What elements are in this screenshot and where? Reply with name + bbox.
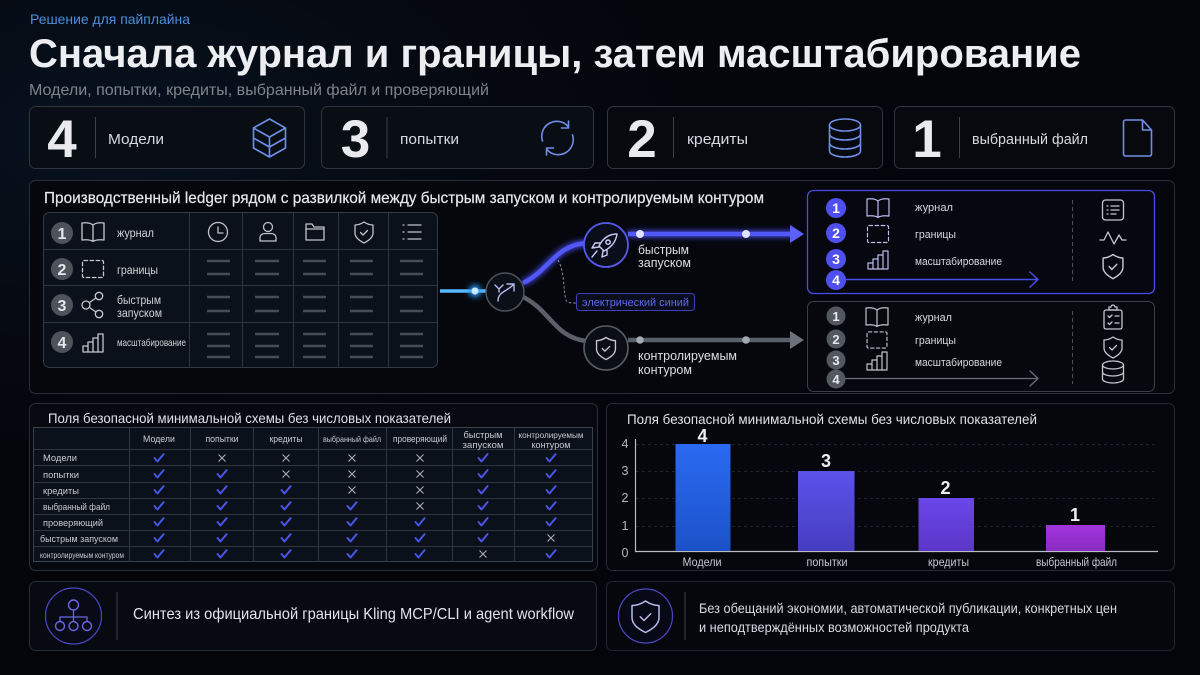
- bar: выбранный файл 1: [1036, 505, 1117, 569]
- y axis labels: 1: [622, 519, 629, 533]
- KPI label выбранный файл: выбранный файл: [972, 132, 1088, 148]
- placeholder cell lines: [207, 261, 423, 357]
- step badges: 4: [832, 272, 840, 288]
- column headers: быстрым: [464, 430, 502, 440]
- panel: bar chart: [606, 404, 1174, 570]
- disclaimer text: Без обещаний экономии, автоматической публикации, конкретных цен: [699, 601, 1117, 616]
- bar: кредиты 2: [918, 478, 974, 569]
- icon: shield node: [584, 326, 628, 370]
- KPI number 4: 4: [47, 110, 77, 169]
- icon: rocket node: [584, 223, 628, 267]
- row 4: масштабирование: масштабирование: [117, 337, 186, 349]
- bar chart: [622, 426, 1158, 569]
- row 3: быстрым запуском: [51, 292, 162, 320]
- row headers: проверяющий: [43, 518, 103, 529]
- KPI number 3: 3: [341, 110, 370, 169]
- matrix heading: Поля безопасной минимальной схемы без числовых показателей: [48, 410, 451, 426]
- column headers: [143, 430, 584, 450]
- step labels: масштабирование: [915, 357, 1002, 369]
- row 2: границы: границы: [117, 265, 158, 277]
- row 1: журнал: журнал: [117, 228, 154, 240]
- y axis labels: 4: [622, 437, 629, 451]
- check and cross marks: [154, 454, 556, 558]
- callout: электрический синий: электрический синий: [582, 297, 689, 309]
- matrix table: [34, 428, 593, 562]
- KPI card: Модели: [30, 106, 304, 169]
- row 1: журнал: [51, 222, 154, 244]
- icon: branch node: [486, 273, 524, 311]
- step labels: [915, 312, 1002, 369]
- disclaimer text: и неподтверждённых возможностей продукта: [699, 620, 969, 635]
- KPI card: попытки: [322, 106, 594, 169]
- row headers: выбранный файл: [43, 502, 110, 513]
- icon: shield badge: [618, 589, 672, 643]
- KPI number 1: 1: [912, 110, 942, 169]
- step badges: [826, 198, 846, 290]
- y axis labels: 2: [622, 491, 629, 505]
- column headers: запуском: [462, 440, 504, 450]
- icon: file: [1124, 120, 1152, 156]
- row 4: масштабирование: [51, 331, 186, 353]
- title: Сначала журнал и границы, затем масштабирование: [29, 32, 1081, 76]
- KPI number 2: 2: [627, 110, 657, 169]
- y axis labels: 3: [622, 464, 629, 478]
- column headers: кредиты: [270, 434, 302, 444]
- upper path: quick launch: [523, 225, 804, 283]
- bar: кредиты 2: кредиты: [928, 555, 969, 569]
- column headers: выбранный файл: [323, 434, 381, 444]
- lower path: controlled contour: [523, 297, 804, 349]
- step badges: 1: [832, 200, 840, 216]
- icon: hierarchy: [46, 588, 102, 644]
- row headers: быстрым запуском: [40, 534, 118, 545]
- row 3: быстрым запуском: запуском: [117, 308, 162, 320]
- fork diagram: [440, 223, 804, 377]
- bar: выбранный файл 1: 1: [1070, 505, 1080, 525]
- row headers: кредиты: [43, 486, 79, 497]
- table header icons: [208, 222, 421, 243]
- row 4: масштабирование: 4: [58, 335, 67, 352]
- KPI card: кредиты: [608, 106, 882, 169]
- label: контролируемым контуром: контролируемым: [638, 349, 737, 363]
- KPI label попытки: попытки: [400, 132, 459, 148]
- step labels: масштабирование: [915, 256, 1002, 268]
- disclaimer text: [699, 601, 1117, 635]
- KPI label кредиты: кредиты: [687, 132, 748, 148]
- row 2: границы: 2: [58, 262, 67, 279]
- row 3: быстрым запуском: быстрым: [117, 295, 161, 307]
- row headers: контролируемым контуром: [40, 550, 124, 560]
- bar: выбранный файл 1: выбранный файл: [1036, 555, 1117, 569]
- panel: quick launch steps: [808, 190, 1154, 294]
- y axis labels: [622, 437, 629, 560]
- subtitle: Модели, попытки, кредиты, выбранный файл и проверяющий: [29, 82, 489, 99]
- label: быстрым запуском: быстрым: [638, 243, 689, 257]
- step badges: 1: [832, 309, 840, 324]
- bar: попытки 3: [798, 451, 854, 569]
- step icons: [866, 308, 888, 370]
- KPI label Модели: Модели: [108, 132, 164, 148]
- label: контролируемым контуром: контуром: [638, 363, 692, 377]
- arrow: [846, 272, 1038, 287]
- icon: layered cube: [254, 119, 286, 157]
- row 3: быстрым запуском: 3: [58, 298, 67, 315]
- step labels: границы: [915, 229, 956, 241]
- panel: comparison matrix: [30, 404, 598, 570]
- row headers: попытки: [43, 470, 79, 481]
- step badges: 2: [832, 225, 840, 241]
- row 1: журнал: 1: [58, 226, 67, 243]
- panel: controlled contour steps: [808, 302, 1154, 392]
- column headers: проверяющий: [393, 434, 447, 444]
- step icons: [867, 199, 889, 269]
- panel: ledger and fork: [30, 180, 1174, 394]
- bar: Модели 4: 4: [697, 426, 708, 446]
- step labels: журнал: [915, 312, 952, 324]
- panel: disclaimer: [606, 582, 1174, 650]
- column headers: Модели: [143, 434, 175, 444]
- right icons: [1102, 305, 1124, 383]
- label: быстрым запуском: [638, 243, 691, 270]
- step labels: журнал: [915, 202, 953, 214]
- column headers: контуром: [532, 440, 570, 450]
- row headers: [40, 453, 124, 560]
- step labels: границы: [915, 335, 956, 347]
- icon: database: [830, 119, 860, 157]
- KPI card: выбранный файл: [894, 106, 1174, 169]
- step badges: 3: [832, 353, 840, 368]
- right icons: [1100, 200, 1126, 279]
- panel heading: Производственный ledger рядом с развилкой между быстрым запуском и контролируемым контуром: [44, 190, 764, 207]
- step badges: 4: [832, 372, 840, 387]
- step badges: 2: [832, 332, 840, 347]
- bar: попытки 3: 3: [821, 451, 831, 471]
- bar: кредиты 2: 2: [940, 478, 951, 498]
- row headers: Модели: [43, 453, 77, 464]
- icon: refresh arrows: [542, 121, 573, 155]
- row 2: границы: [51, 258, 158, 280]
- chart heading: Поля безопасной минимальной схемы без числовых показателей: [627, 411, 1037, 427]
- bar: попытки 3: попытки: [806, 555, 848, 569]
- step badges: [826, 306, 846, 388]
- step badges: 3: [832, 251, 840, 267]
- callout: электрический синий: [558, 260, 694, 310]
- label: контролируемым контуром: [638, 349, 737, 377]
- note text: Синтез из официальной границы Kling MCP/CLI и agent workflow: [133, 606, 574, 623]
- label: быстрым запуском: запуском: [638, 256, 691, 270]
- y axis labels: 0: [622, 546, 629, 560]
- panel: source note: [30, 582, 596, 650]
- step labels: [915, 202, 1002, 268]
- column headers: попытки: [206, 434, 238, 444]
- bar: Модели 4: Модели: [682, 555, 722, 569]
- bar: Модели 4: [676, 426, 730, 569]
- ledger table: [44, 212, 438, 368]
- eyebrow label: Решение для пайплайна: [30, 11, 190, 27]
- input line: [440, 285, 488, 297]
- column headers: контролируемым: [518, 430, 584, 440]
- arrow: [846, 371, 1038, 386]
